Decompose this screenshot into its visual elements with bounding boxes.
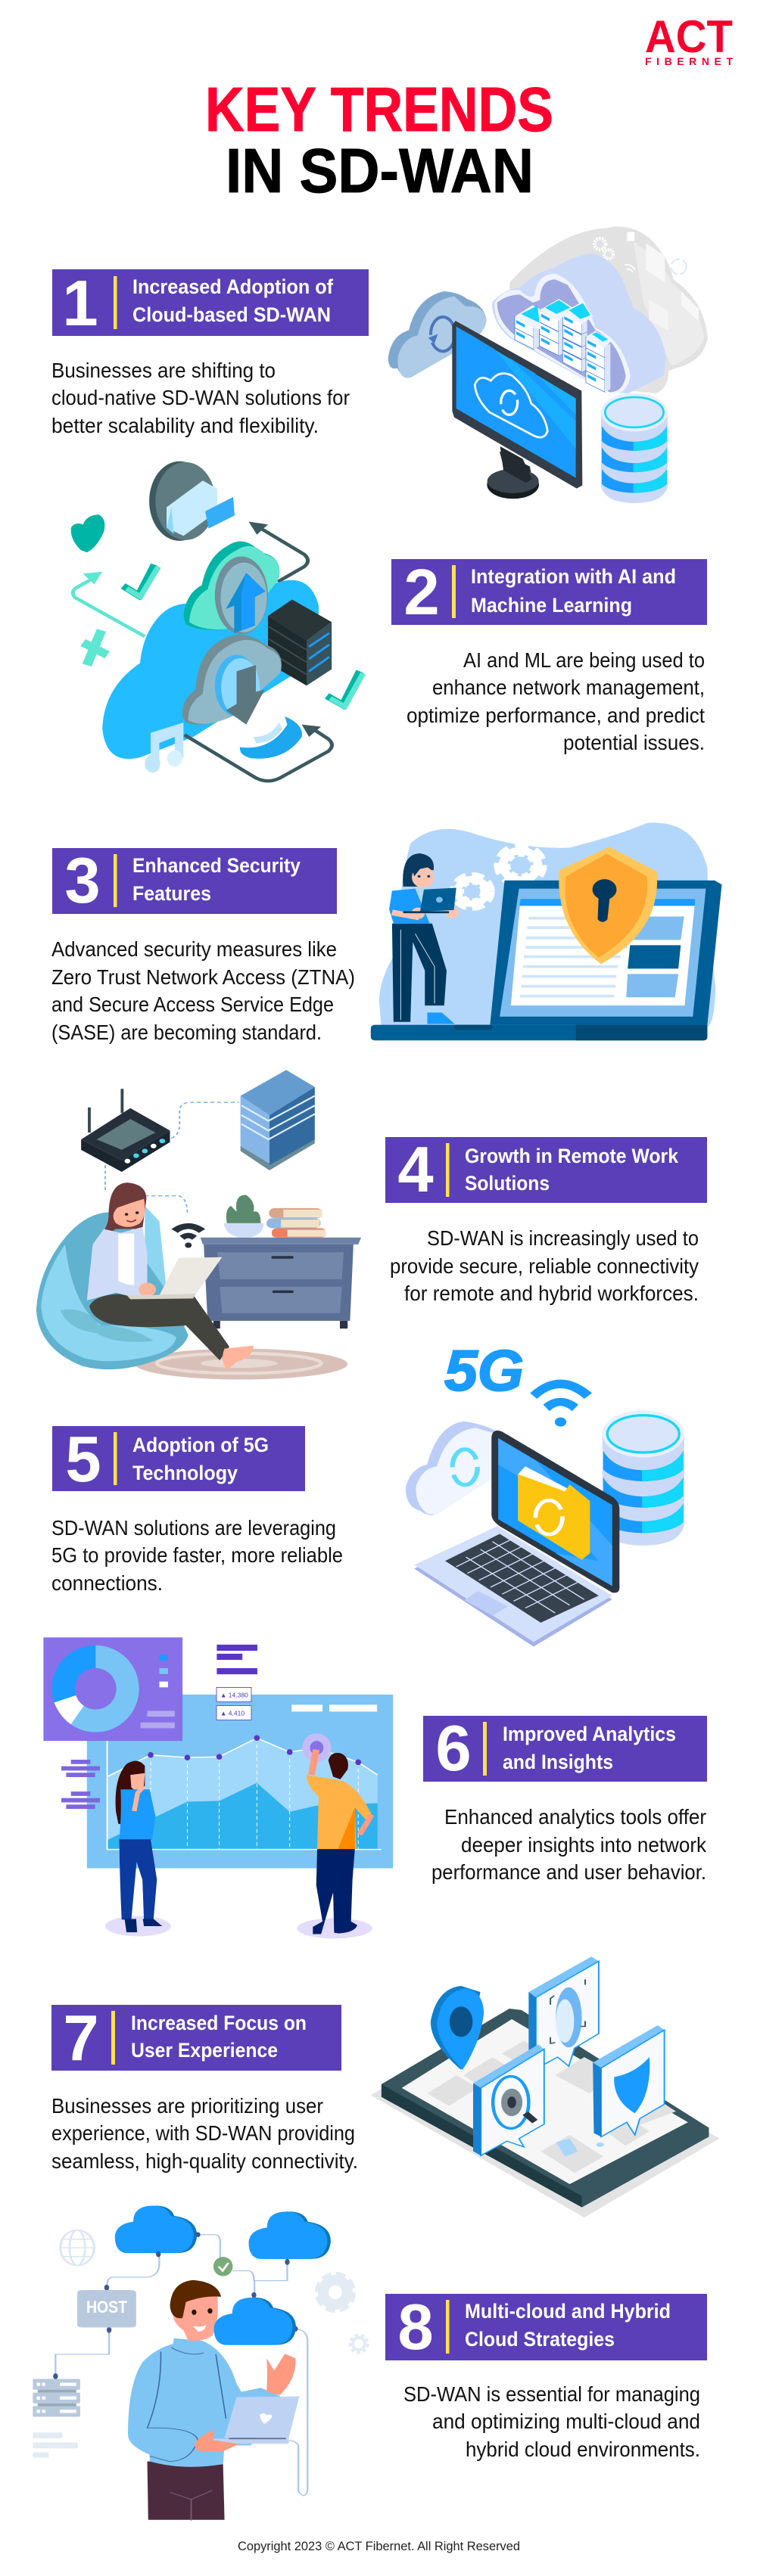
icon: small gear — [351, 2336, 366, 2351]
panel 8 heading: Multi-cloud and Hybrid — [465, 2300, 671, 2323]
panel 4 text: for remote and hybrid workforces. — [404, 1282, 699, 1305]
panel 4 text: provide secure, reliable connectivity — [390, 1254, 699, 1278]
panel 7 text — [51, 2094, 358, 2173]
panel 1 text: Businesses are shifting to — [51, 359, 276, 382]
panel 3 text — [51, 937, 355, 1044]
data tag 4,410 — [217, 1705, 251, 1720]
panel 6 heading — [423, 1713, 707, 1785]
panel 3 text: Advanced security measures like — [51, 937, 337, 961]
footer copyright: Copyright 2023 © ACT Fibernet. All Right Reserved — [238, 2539, 520, 2553]
panel 5 text: SD-WAN solutions are leveraging — [51, 1516, 336, 1540]
panel 5 heading: 5 — [65, 1424, 101, 1496]
panel 7 heading: Increased Focus on — [131, 2012, 307, 2034]
panel 4 text — [390, 1226, 699, 1305]
panel 4 heading: Growth in Remote Work — [465, 1145, 679, 1167]
panel 6 heading: and Insights — [503, 1751, 613, 1773]
panel 5 text — [51, 1516, 343, 1595]
data tag 14,380: ▲ 14,380 — [220, 1692, 248, 1699]
panel 6 text: Enhanced analytics tools offer — [444, 1805, 706, 1829]
logo: ACT Fibernet: ACT — [645, 11, 733, 62]
panel 5 heading: Adoption of 5G — [132, 1434, 269, 1456]
panel 2 heading: 2 — [403, 557, 440, 629]
panel 2 heading — [391, 557, 707, 629]
panel 8 heading: 8 — [397, 2292, 434, 2363]
title: IN SD-WAN — [226, 135, 534, 206]
panel 8 heading: Cloud Strategies — [465, 2328, 615, 2351]
panel 8 text: SD-WAN is essential for managing — [403, 2382, 700, 2406]
illustration 2: cloud upload and download — [71, 461, 363, 781]
panel 7 heading: 7 — [63, 2003, 99, 2074]
panel 8 text: hybrid cloud environments. — [466, 2438, 700, 2461]
HOST label: HOST — [86, 2298, 127, 2317]
panel 5 text: connections. — [51, 1571, 163, 1595]
panel 6 heading: 6 — [435, 1713, 472, 1785]
panel 6 heading: Improved Analytics — [503, 1723, 676, 1745]
panel 4 heading — [385, 1134, 707, 1206]
panel 6 text — [431, 1805, 706, 1884]
illustration 8: multi-cloud network with man — [33, 2205, 366, 2520]
panel 2 heading: Machine Learning — [471, 594, 632, 617]
panel 7 text: seamless, high-quality connectivity. — [51, 2149, 358, 2173]
panel 1 heading: Cloud-based SD-WAN — [132, 303, 331, 326]
title — [205, 74, 553, 206]
panel 5 text: 5G to provide faster, more reliable — [51, 1543, 343, 1567]
panel 3 text: (SASE) are becoming standard. — [51, 1021, 322, 1044]
panel 4 text: SD-WAN is increasingly used to — [427, 1226, 699, 1250]
illustration 5: 5G laptop with cloud and database: 5G — [444, 1339, 524, 1403]
illustration 3: security shield and laptop — [371, 822, 722, 1040]
illustration 7: phone map with pin and security callouts — [371, 1956, 719, 2217]
panel 8 text — [403, 2382, 700, 2461]
illustration 1: cloud servers, monitor and database — [388, 226, 708, 503]
logo: ACT Fibernet: FIBERNET — [645, 55, 733, 67]
panel 4 heading: 4 — [397, 1134, 434, 1206]
panel 8 text: and optimizing multi-cloud and — [432, 2410, 700, 2433]
panel 7 heading — [51, 2003, 341, 2074]
panel 6 text: deeper insights into network — [461, 1833, 706, 1857]
panel 3 heading: 3 — [64, 845, 101, 917]
panel 2 text — [407, 648, 705, 754]
panel 3 heading — [52, 845, 337, 917]
panel 2 text: enhance network management, — [432, 676, 705, 699]
panel 3 heading: Enhanced Security — [132, 854, 301, 877]
panel 2 heading: Integration with AI and — [471, 565, 676, 588]
panel 8 heading — [385, 2292, 707, 2363]
panel 7 text: Businesses are prioritizing user — [51, 2094, 323, 2118]
panel 6 text: performance and user behavior. — [431, 1860, 706, 1884]
panel 5 heading: Technology — [132, 1462, 238, 1484]
panel 2 text: AI and ML are being used to — [463, 648, 705, 672]
panel 7 text: experience, with SD-WAN providing — [51, 2121, 355, 2145]
panel 1 heading — [52, 268, 369, 340]
panel 4 heading: Solutions — [465, 1172, 550, 1195]
panel 5 heading — [52, 1424, 305, 1496]
data tag 4,410: ▲ 4,410 — [220, 1710, 245, 1717]
title: KEY TRENDS — [205, 74, 553, 144]
panel 1 text: better scalability and flexibility. — [51, 414, 319, 437]
illustration 5: 5G laptop with cloud and database — [406, 1339, 684, 1647]
illustration 6: analytics dashboard — [43, 1637, 393, 1938]
panel 7 heading: User Experience — [131, 2039, 278, 2062]
icon: large gear — [321, 2278, 350, 2307]
panel 2 text: potential issues. — [563, 731, 705, 754]
data tag 14,380 — [217, 1687, 251, 1702]
panel 3 text: Zero Trust Network Access (ZTNA) — [51, 965, 355, 989]
panel 1 heading: 1 — [62, 268, 98, 340]
panel 1 heading: Increased Adoption of — [132, 275, 334, 298]
panel 1 text — [51, 359, 350, 437]
panel 2 text: optimize performance, and predict — [407, 704, 705, 727]
panel 3 text: and Secure Access Service Edge — [51, 993, 334, 1016]
illustration 4: remote worker on bean bag — [36, 1070, 361, 1379]
panel 1 text: cloud-native SD-WAN solutions for — [51, 386, 350, 409]
panel 3 heading: Features — [132, 882, 211, 905]
